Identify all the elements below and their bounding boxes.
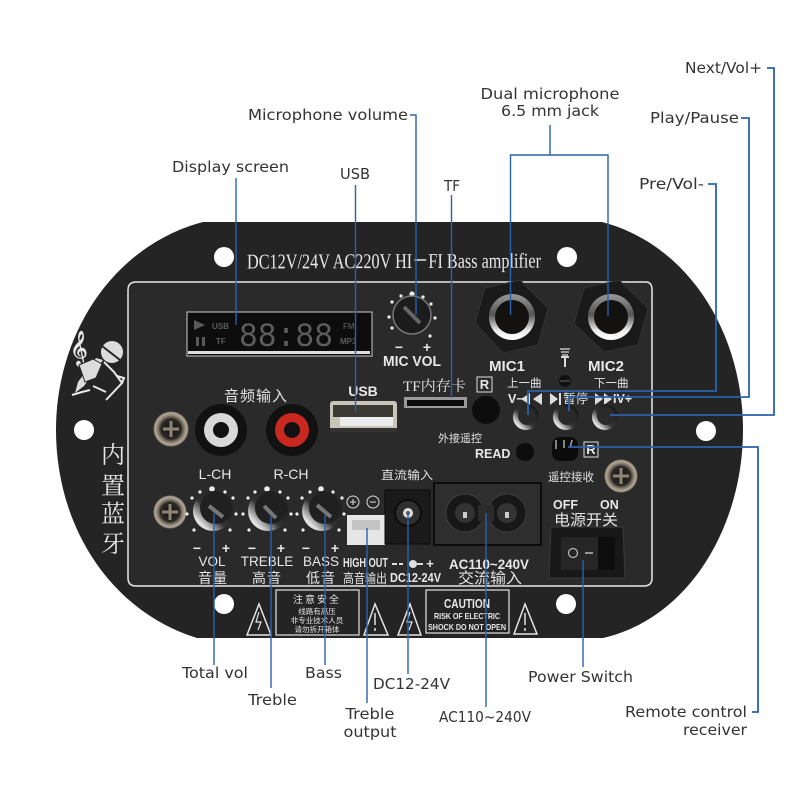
display screen [187, 312, 372, 357]
remote receiver: 遥控接收 [548, 470, 594, 484]
tone knobs: + [277, 540, 285, 556]
mounting holes [74, 247, 716, 614]
TF card slot [403, 377, 467, 408]
power switch: 电源开关 [554, 512, 618, 529]
board title: DC12V/24V AC220V HI－FI Bass amplifier [247, 248, 541, 274]
tone knobs: + [222, 540, 230, 556]
display screen: 88:88 [239, 319, 333, 357]
external remote jack: R [480, 377, 490, 392]
DC input jack: 直流输入 [381, 468, 434, 482]
icon: microphone and music note [70, 331, 124, 400]
audio input sockets: L-CH [199, 466, 231, 482]
USB port: USB [348, 383, 378, 399]
label: TF: TF [443, 177, 460, 195]
label: Pre/Vol-: Pre/Vol- [639, 175, 704, 193]
external remote jack [438, 377, 534, 461]
tone knobs: TREBLE [241, 554, 293, 569]
microphone jack MIC1: MIC1 [489, 359, 525, 375]
caution notice: RISK OF ELECTRIC [434, 611, 500, 621]
external remote jack: 外接遥控 [438, 431, 482, 445]
tone knobs: 低音 [306, 570, 336, 586]
DC input jack: DC12-24V [390, 571, 442, 585]
label: Dual microphone jack: 6.5 mm jack [501, 102, 599, 120]
microphone jack MIC1 [475, 280, 548, 375]
display screen: TF [216, 337, 226, 346]
DC input jack [381, 468, 442, 585]
label: Remote control receiver: receiver [683, 721, 748, 739]
audio input sockets [195, 388, 318, 482]
label: Remote control receiver: Remote control [625, 703, 747, 721]
Chinese safety notice: 注意安全 [293, 593, 341, 606]
label: Treble: Treble [247, 691, 297, 709]
caution notice [426, 590, 509, 633]
Chinese safety notice: 请勿拆开箱体 [294, 624, 340, 634]
power switch: OFF [553, 498, 578, 512]
track control buttons: 上一曲 [507, 377, 542, 390]
USB port [330, 383, 397, 432]
label: Bass: Bass [305, 664, 342, 682]
remote receiver: R [586, 442, 596, 457]
side label: built-in Bluetooth: 蓝 [101, 501, 125, 528]
leader lines [214, 68, 774, 712]
label: Treble output: output [344, 723, 396, 741]
label: Treble output [344, 705, 396, 741]
side label: built-in Bluetooth: 内 [101, 442, 125, 469]
tone knobs: 音量 [198, 570, 228, 586]
label: Power Switch: Power Switch [528, 668, 633, 686]
label: USB: USB [340, 165, 370, 183]
mic volume knob [383, 291, 441, 370]
microphone jack MIC2: MIC2 [588, 359, 624, 375]
AC input socket [434, 483, 541, 587]
track control buttons [507, 349, 632, 430]
tone knobs: 高音 [252, 570, 282, 586]
high output connector: 高音输出 [343, 571, 387, 586]
display screen: MP3 [340, 337, 357, 346]
display screen: FM [343, 322, 355, 331]
label: Dual microphone jack [480, 85, 620, 120]
AC input socket: 交流输入 [458, 569, 522, 587]
tone knobs: VOL [198, 554, 226, 569]
track control buttons: 暂停 [563, 391, 588, 406]
tone knobs [185, 486, 346, 586]
Chinese safety notice: 非专业技术人员 [291, 615, 344, 625]
DC input jack: + [426, 556, 434, 571]
external remote jack: READ [475, 447, 510, 461]
display screen: USB [212, 322, 229, 331]
label: Play/Pause: Play/Pause [650, 109, 739, 127]
mic volume knob: + [423, 339, 431, 355]
audio input sockets: 音频输入 [224, 388, 288, 405]
audio input sockets: R-CH [274, 466, 308, 482]
tone knobs: BASS [303, 554, 339, 569]
caution notice: SHOCK DO NOT OPEN [428, 622, 506, 632]
tone knobs: + [331, 540, 339, 556]
screws [153, 411, 638, 529]
label: DC12-24V: DC12-24V [373, 675, 450, 693]
power switch [549, 498, 625, 578]
side label: built-in Bluetooth: 置 [101, 473, 125, 500]
high output connector: HIGH OUT [343, 555, 388, 570]
TF card slot: TF内存卡 [403, 377, 466, 395]
caution notice: CAUTION [444, 597, 490, 611]
mic volume knob: MIC VOL [383, 354, 441, 370]
track control buttons: V− [508, 392, 524, 406]
side label: built-in Bluetooth: 牙 [101, 532, 125, 558]
high output connector [343, 496, 388, 586]
label: Display screen: Display screen [172, 158, 289, 176]
warning triangles [247, 604, 537, 635]
label: Remote control receiver [625, 703, 748, 739]
label: Total vol: Total vol [181, 664, 248, 682]
power switch: ON [600, 498, 619, 512]
tone knobs: − [302, 540, 310, 556]
microphone jack MIC2 [574, 280, 648, 375]
label: Dual microphone jack: Dual microphone [480, 85, 620, 103]
Chinese safety notice: 线路有高压 [298, 606, 336, 616]
label: Treble output: Treble [344, 705, 394, 723]
tone knobs: − [193, 540, 201, 556]
label: AC110~240V: AC110~240V [439, 708, 531, 726]
mic volume knob: − [395, 339, 403, 355]
Chinese safety notice [276, 590, 359, 635]
panel: amplifier board [56, 222, 743, 638]
remote receiver [548, 437, 598, 484]
track control buttons: IV+ [613, 392, 632, 406]
track control buttons: 下一曲 [594, 377, 628, 390]
icon: microphone and music note: 𝄞 [70, 331, 88, 367]
tone knobs: − [248, 540, 256, 556]
label: Microphone volume: Microphone volume [248, 106, 408, 124]
AC input socket: AC110~240V [449, 557, 529, 572]
side label: built-in Bluetooth [101, 442, 125, 558]
label: Next/Vol+: Next/Vol+ [685, 59, 762, 77]
